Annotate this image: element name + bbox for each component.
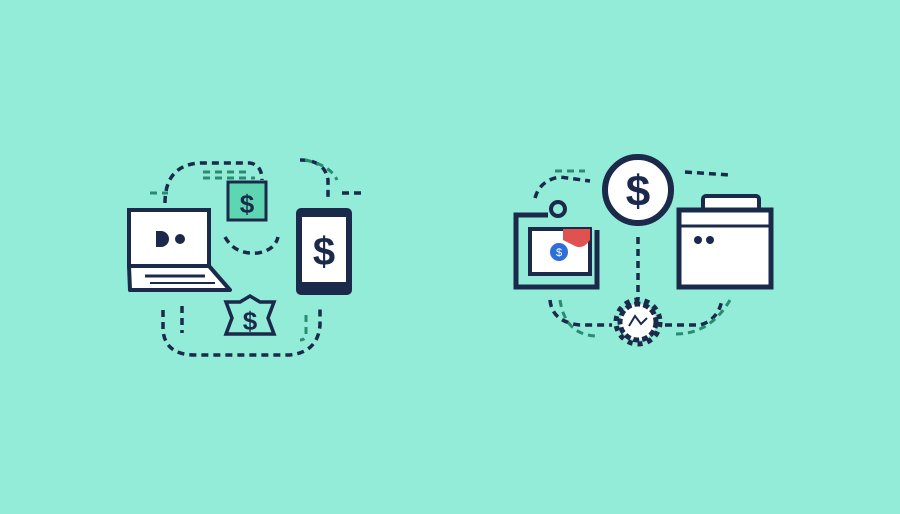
arrow: right dashed connectors (535, 172, 730, 325)
icon: banknote bottom: $ (243, 306, 258, 336)
panel: right wallet and bank cycle (516, 157, 771, 344)
icon: banknote top (228, 182, 266, 220)
icon: smartphone with dollar: $ (313, 230, 335, 274)
icon: laptop (129, 210, 230, 290)
icon: folder / browser (679, 196, 771, 287)
icon: dollar coin: $ (626, 167, 650, 216)
icon: dollar coin (605, 157, 671, 223)
arrow: left top dashed loop (163, 160, 362, 355)
icon: gear (616, 300, 660, 344)
icon: wallet: $ (556, 247, 562, 259)
icon: banknote top: $ (240, 189, 255, 219)
panel: left device payment cycle (129, 160, 362, 355)
icon: wallet (516, 202, 597, 287)
icon: banknote bottom (226, 296, 274, 336)
icon: smartphone with dollar (296, 208, 352, 295)
